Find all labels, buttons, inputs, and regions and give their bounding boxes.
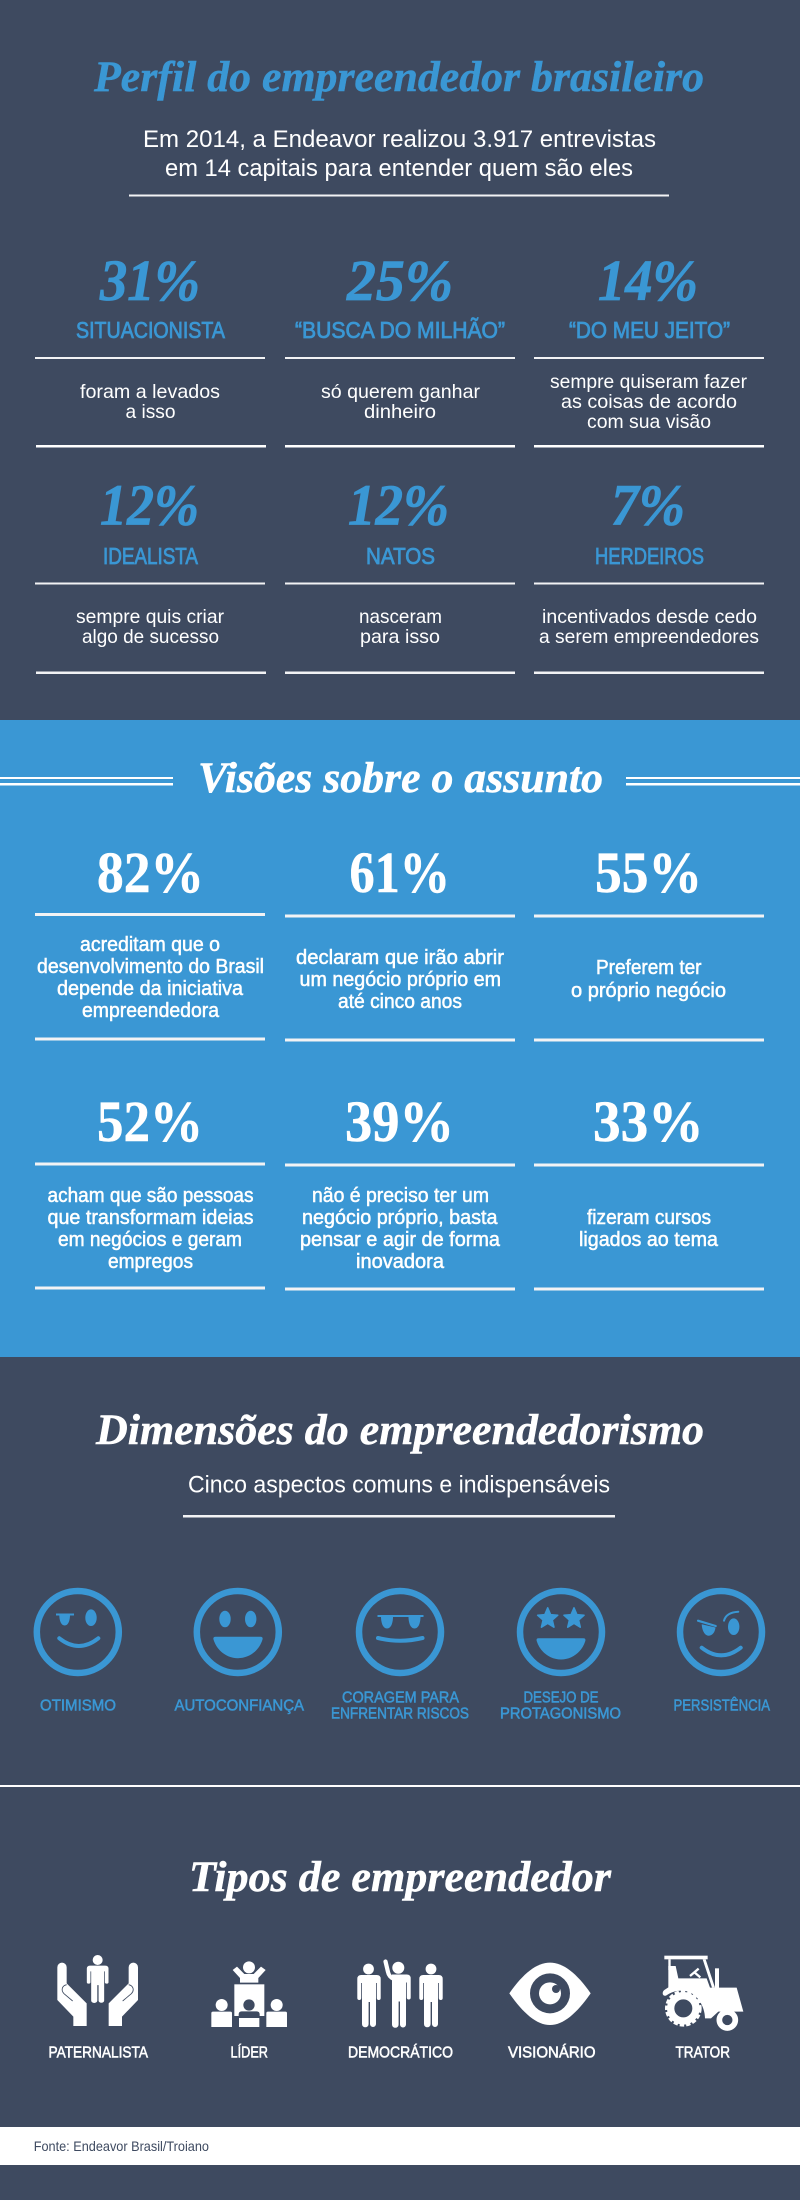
panel: perfil do empreendedor (35, 54, 764, 674)
stat: 52% (35, 1089, 265, 1290)
label: líder: LÍDER (230, 2042, 268, 2062)
stat: natos: nasceram (359, 606, 442, 628)
stat: idealista: sempre quis criar (76, 606, 224, 628)
stat: 61%: 61% (350, 840, 450, 905)
intro text (143, 126, 656, 182)
panel: tipos de empreendedor (48, 1854, 743, 2062)
stat: busca do milhão: 25% (346, 248, 453, 313)
stat: 55%: o próprio negócio (571, 980, 726, 1002)
stat: 55% (534, 840, 764, 1042)
stat: 39%: negócio próprio, basta (302, 1207, 498, 1229)
stat: do meu jeito (534, 248, 764, 448)
panel: visões sobre o assunto (0, 720, 800, 1357)
title: Perfil do empreendedor brasileiro (93, 54, 704, 101)
stat: 39%: 39% (345, 1089, 454, 1154)
label: coragem para enfrentar riscos: CORAGEM PARA (342, 1690, 459, 1706)
stat: 52%: em negócios e geram (58, 1229, 242, 1251)
stat: natos: 12% (348, 472, 449, 538)
stat: do meu jeito: as coisas de acordo (561, 391, 737, 413)
stat: 82%: empreendedora (82, 1000, 220, 1022)
stat: do meu jeito: com sua visão (587, 411, 711, 433)
stat: situacionista: 31% (99, 248, 200, 313)
label: autoconfiança: AUTOCONFIANÇA (174, 1698, 304, 1714)
label: desejo de protagonismo: PROTAGONISMO (500, 1706, 621, 1722)
label: paternalista: PATERNALISTA (48, 2044, 148, 2062)
stat: 61%: até cinco anos (338, 991, 462, 1013)
label: coragem para enfrentar riscos (331, 1690, 469, 1722)
icon: three people, one raising hand (357, 1962, 443, 2028)
stat: do meu jeito: 14% (598, 248, 698, 313)
stat: 33%: ligados ao tema (579, 1229, 719, 1251)
icon: autoconfiança smiley (197, 1591, 279, 1673)
stat: 39%: pensar e agir de forma (300, 1229, 501, 1251)
stat: 82% (35, 840, 265, 1040)
stat: herdeiros (534, 472, 764, 674)
stat: idealista: 12% (100, 472, 199, 538)
stat: idealista: IDEALISTA (103, 543, 199, 569)
stat: 39% (285, 1089, 515, 1290)
label: democrático: DEMOCRÁTICO (348, 2042, 453, 2062)
stat: 39%: não é preciso ter um (312, 1185, 489, 1207)
stat: natos (285, 472, 515, 674)
stat: 82%: desenvolvimento do Brasil (37, 956, 264, 978)
icon: persistência smiley (680, 1591, 762, 1673)
stat: 61%: um negócio próprio em (300, 969, 501, 991)
stat: 61%: declaram que irão abrir (296, 947, 504, 969)
stat: busca do milhão: “BUSCA DO MILHÃO” (295, 317, 505, 343)
stat: 82%: depende da iniciativa (57, 978, 244, 1000)
label: visionário: VISIONÁRIO (508, 2042, 596, 2062)
footer source bar: Fonte: Endeavor Brasil/Troiano (34, 2138, 209, 2154)
label: desejo de protagonismo (500, 1690, 621, 1722)
stat: do meu jeito: sempre quiseram fazer (550, 371, 747, 393)
stat: 33%: 33% (593, 1089, 704, 1154)
icon: tractor (663, 1956, 743, 2028)
intro text: em 14 capitais para entender quem são eles (165, 155, 633, 182)
stat: 82%: acreditam que o (80, 934, 220, 956)
stat: 52%: 52% (97, 1089, 203, 1154)
heading: Dimensões do empreendedorismo (95, 1407, 704, 1454)
stat: 55%: Preferem ter (596, 957, 702, 979)
stat: busca do milhão (285, 248, 515, 448)
label: trator: TRATOR (676, 2044, 730, 2062)
subheading: Cinco aspectos comuns e indispensáveis (188, 1472, 610, 1498)
stat: natos: para isso (360, 626, 440, 648)
stat: situacionista (35, 248, 266, 448)
stat: natos: NATOS (366, 543, 435, 569)
icon: coragem smiley (359, 1591, 441, 1673)
stat: 82%: 82% (97, 840, 204, 905)
footer source bar (0, 2127, 800, 2165)
icon: eye (509, 1963, 591, 2025)
stat: herdeiros: HERDEIROS (595, 543, 704, 569)
stat: situacionista: a isso (126, 401, 176, 423)
stat: busca do milhão: dinheiro (364, 401, 436, 423)
stat: 52%: acham que são pessoas (48, 1185, 254, 1207)
stat: busca do milhão: só querem ganhar (321, 381, 480, 403)
stat: 52%: que transformam ideias (48, 1207, 254, 1229)
icon: leader on podium (211, 1961, 287, 2027)
stat: herdeiros: 7% (611, 472, 685, 538)
heading: Tipos de empreendedor (189, 1854, 612, 1901)
icon: otimismo smiley (37, 1591, 119, 1673)
label: desejo de protagonismo: DESEJO DE (524, 1690, 598, 1706)
label: persistência: PERSISTÊNCIA (674, 1696, 770, 1714)
stat: idealista: algo de sucesso (82, 626, 219, 648)
stat: 52%: empregos (108, 1251, 193, 1273)
stat: situacionista: SITUACIONISTA (76, 317, 226, 343)
stat: 33%: fizeram cursos (587, 1207, 711, 1229)
label: otimismo: OTIMISMO (40, 1698, 116, 1714)
stat: idealista (35, 472, 266, 674)
stat: 61% (285, 840, 515, 1042)
icon: hands holding person (57, 1955, 138, 2026)
label: coragem para enfrentar riscos: ENFRENTAR RISCOS (331, 1706, 469, 1722)
stat: herdeiros: a serem empreendedores (539, 626, 759, 648)
intro text: Em 2014, a Endeavor realizou 3.917 entrevistas (143, 126, 656, 153)
stat: do meu jeito: “DO MEU JEITO” (569, 317, 730, 343)
stat: situacionista: foram a levados (80, 381, 220, 403)
stat: 55%: 55% (595, 840, 702, 905)
icon: desejo de protagonismo smiley (520, 1591, 602, 1673)
heading with double rules: Visões sobre o assunto (198, 755, 603, 802)
stat: 39%: inovadora (356, 1251, 445, 1273)
stat: 33% (534, 1089, 764, 1290)
panel: dimensões do empreendedorismo (37, 1407, 770, 1722)
stat: herdeiros: incentivados desde cedo (542, 606, 757, 628)
